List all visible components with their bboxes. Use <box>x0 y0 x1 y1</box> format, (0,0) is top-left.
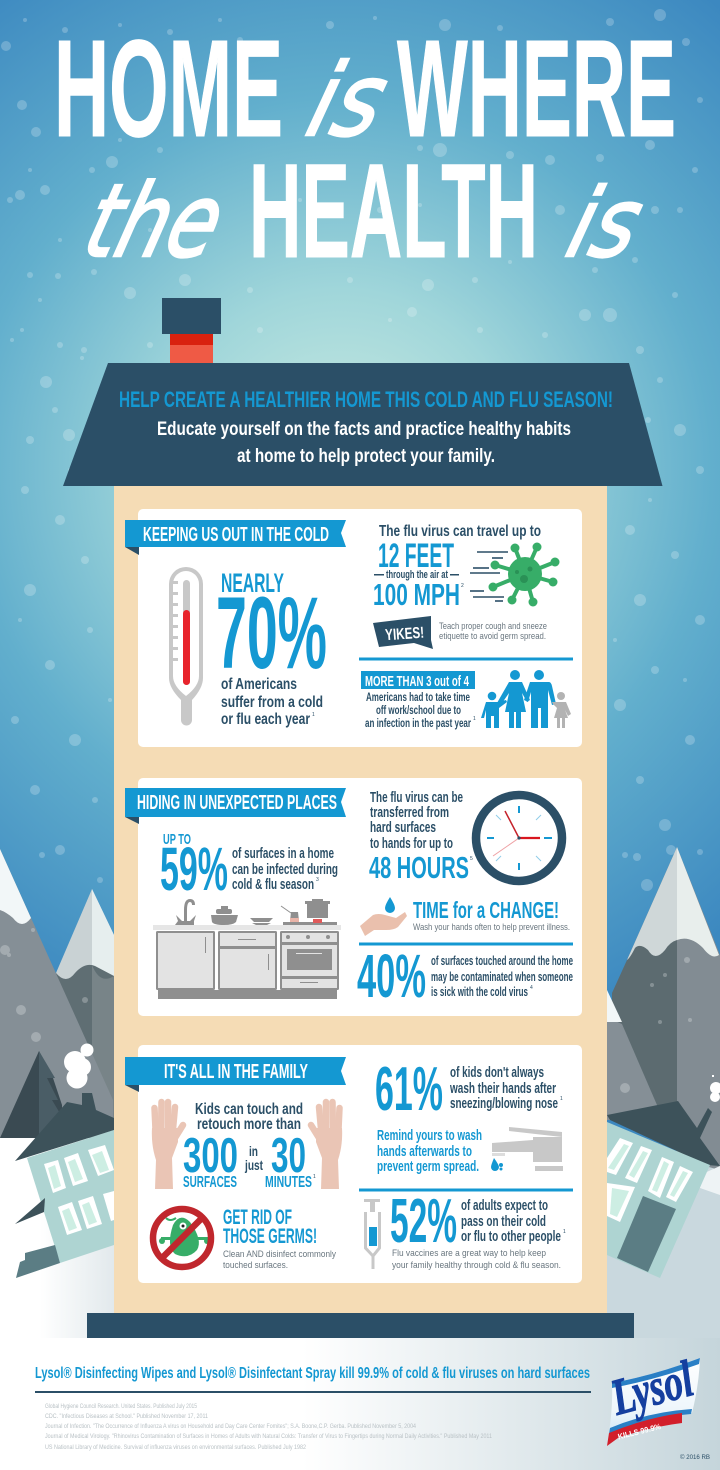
roof with intro text <box>63 363 662 486</box>
stat: up to 59%: UP TO <box>163 831 191 848</box>
stat: 40%: may be contaminated when someone <box>431 970 573 984</box>
copyright: © 2016 RB <box>680 1453 710 1461</box>
title: is <box>296 43 399 160</box>
stat: 300 surfaces in 30 minutes: retouch more than <box>197 1116 301 1133</box>
house body <box>114 486 607 1313</box>
logo: Lysol <box>605 1350 700 1446</box>
icon: no germs sign <box>153 1209 211 1267</box>
stat: 300 surfaces in 30 minutes <box>183 1101 316 1191</box>
banner: IT'S ALL IN THE FAMILY <box>164 1061 308 1083</box>
flu virus transfer text: The flu virus can be <box>370 789 463 806</box>
chimney <box>162 298 221 363</box>
stat: 300 surfaces in 30 minutes: MINUTES <box>265 1174 312 1191</box>
flu virus travel text <box>373 523 541 612</box>
stat: 52% <box>390 1187 566 1271</box>
banner: KEEPING US OUT IN THE COLD <box>143 524 329 546</box>
stat: up to 59%: cold & flu season <box>232 877 314 893</box>
callout: get rid of those germs: Clean AND disinfect commonly <box>223 1249 336 1260</box>
stat: 61%: 61% <box>375 1055 443 1124</box>
stat: 52%: or flu to other people <box>461 1229 561 1245</box>
callout: yikes: etiquette to avoid germ spread. <box>439 631 546 642</box>
icon: left hand <box>152 1102 183 1189</box>
stat: 52%: your family healthy through cold & flu season. <box>392 1260 561 1271</box>
panel: it's all in the family <box>125 1045 582 1283</box>
banner: HIDING IN UNEXPECTED PLACES <box>137 792 337 814</box>
icon: family <box>481 670 571 728</box>
references: Global Hygiene Council Research. United States. Published July 2015 <box>45 1404 198 1410</box>
callout: yikes: Teach proper cough and sneeze <box>439 621 547 632</box>
stat: up to 59%: of surfaces in a home <box>232 846 334 862</box>
flu virus travel text: 2 <box>461 583 464 589</box>
title: is <box>557 168 654 279</box>
stat: 40%: is sick with the cold virus <box>431 985 528 999</box>
flu virus travel text: The flu virus can travel up to <box>379 523 541 540</box>
references: US National Library of Medicine. Survival of influenza viruses on environmental surfaces. Published July 1982 <box>45 1445 307 1451</box>
stat: 61% <box>375 1055 563 1124</box>
callout: yikes: YIKES! <box>385 625 425 644</box>
falling snow <box>1 9 705 891</box>
title <box>54 12 676 286</box>
callout: get rid of those germs <box>223 1206 336 1271</box>
banner <box>125 520 346 555</box>
references: Journal of Medical Virology. "Rhinovirus Contamination of Surfaces in Homes of Adults with Natural Colds: Transfer of Virus to Fingertips during Normal Daily Activities." Published May 2011 <box>45 1434 493 1440</box>
reminder text <box>377 1128 482 1175</box>
roof with intro text: Educate yourself on the facts and practice healthy habits <box>157 418 571 440</box>
icon: faucet <box>491 1127 563 1171</box>
stat: 300 surfaces in 30 minutes: 300 <box>183 1129 238 1183</box>
stat: 40%: of surfaces touched around the home <box>431 954 573 968</box>
icon: right hand <box>311 1102 342 1189</box>
stat: 61%: wash their hands after <box>449 1081 556 1097</box>
title: HOME <box>54 12 283 166</box>
flu virus transfer text <box>369 789 473 885</box>
stat: more than 3 out of 4: an infection in the past year <box>365 718 471 730</box>
stat: up to 59%: 3 <box>316 877 319 883</box>
stat: more than 3 out of 4: MORE THAN 3 out of 4 <box>365 674 469 690</box>
panel: keeping us out in the cold <box>125 509 582 747</box>
stat: nearly 70%: NEARLY <box>221 568 284 598</box>
stat: nearly 70%: 1 <box>312 712 315 718</box>
callout: time for a change: TIME for a CHANGE! <box>413 897 559 923</box>
stat: 300 surfaces in 30 minutes: 30 <box>271 1129 306 1183</box>
stat: 40% <box>357 942 573 1010</box>
reminder text: Remind yours to wash <box>377 1128 482 1144</box>
icon: thermometer <box>169 567 203 726</box>
callout: time for a change <box>413 897 570 933</box>
title: the <box>73 163 237 281</box>
stat: up to 59%: 59% <box>160 835 228 903</box>
stat: more than 3 out of 4 <box>361 671 476 730</box>
callout: time for a change: Wash your hands often to help prevent illness. <box>413 922 570 933</box>
stat: 61%: 1 <box>560 1096 563 1102</box>
stat: 300 surfaces in 30 minutes: in <box>249 1143 258 1159</box>
stat: more than 3 out of 4: 1 <box>473 716 476 722</box>
callout: yikes <box>373 616 547 649</box>
flu virus transfer text: to hands for up to <box>370 835 453 852</box>
banner <box>125 788 346 824</box>
flu virus travel text: through the air at <box>386 569 448 581</box>
banner <box>125 1057 346 1092</box>
icon: clock <box>476 795 562 881</box>
stat: 52%: Flu vaccines are a great way to help keep <box>392 1248 546 1259</box>
flu virus transfer text: transferred from <box>370 804 449 821</box>
stat: 61%: of kids don't always <box>450 1065 544 1081</box>
stat: more than 3 out of 4: off work/school due to <box>376 705 461 717</box>
reminder text: prevent germ spread. <box>377 1159 479 1175</box>
stat: up to 59% <box>160 831 338 903</box>
flu virus transfer text: hard surfaces <box>370 819 436 836</box>
callout: get rid of those germs: touched surfaces. <box>223 1260 288 1271</box>
icon: hand and water drop <box>360 897 407 936</box>
right mountains and house <box>607 847 720 1340</box>
references: CDC. "Infectious Diseases at School." Published November 17, 2011 <box>45 1414 209 1420</box>
stat: 40%: 40% <box>357 942 426 1010</box>
icon: virus with speed lines <box>470 542 560 606</box>
flu virus transfer text: 5 <box>470 856 473 862</box>
stat: nearly 70%: 70% <box>216 576 327 690</box>
references: Journal of Infection. "The Occurrence of Influenza A virus on Household and Day Care Center Fomites"; S.A. Boone,C.P. Gerba. Published November 5, 2004 <box>45 1424 417 1430</box>
house base <box>87 1313 634 1338</box>
stat: up to 59%: can be infected during <box>232 862 338 878</box>
reminder text: hands afterwards to <box>377 1144 472 1160</box>
stat: 52%: 52% <box>390 1187 457 1256</box>
stat: 52%: 1 <box>563 1229 566 1235</box>
stat: 300 surfaces in 30 minutes: Kids can touch and <box>195 1101 303 1118</box>
flu virus transfer text: 48 HOURS <box>369 850 469 885</box>
stat: 40%: 4 <box>530 985 533 991</box>
callout: get rid of those germs: GET RID OF <box>223 1206 292 1229</box>
stat: nearly 70%: or flu each year <box>221 711 310 728</box>
illustration: kitchen <box>153 899 341 999</box>
stat: more than 3 out of 4: Americans had to take time <box>366 692 470 704</box>
references <box>45 1404 493 1451</box>
stat: 52%: pass on their cold <box>461 1214 546 1230</box>
stat: nearly 70% <box>216 568 327 728</box>
footer ground <box>0 1338 720 1470</box>
logo: Lysol: KILLS 99.9% <box>617 1422 662 1441</box>
icon: syringe <box>364 1199 380 1269</box>
left mountains and house <box>0 849 114 1340</box>
flu virus travel text: 12 FEET <box>378 537 454 575</box>
stat: nearly 70%: suffer from a cold <box>221 694 323 711</box>
stat: 61%: sneezing/blowing nose <box>450 1096 558 1112</box>
roof with intro text: at home to help protect your family. <box>237 445 495 467</box>
panel: hiding in unexpected places <box>125 778 582 1016</box>
callout: get rid of those germs: THOSE GERMS! <box>223 1225 317 1248</box>
flu virus travel text: 100 MPH <box>373 577 460 612</box>
stat: 300 surfaces in 30 minutes: SURFACES <box>183 1174 237 1191</box>
mountain snow overlay <box>0 928 692 1093</box>
stat: nearly 70%: of Americans <box>221 676 297 693</box>
stat: 300 surfaces in 30 minutes: just <box>244 1157 263 1173</box>
stat: 52%: of adults expect to <box>461 1198 548 1214</box>
stat: 300 surfaces in 30 minutes: 1 <box>313 1174 316 1180</box>
